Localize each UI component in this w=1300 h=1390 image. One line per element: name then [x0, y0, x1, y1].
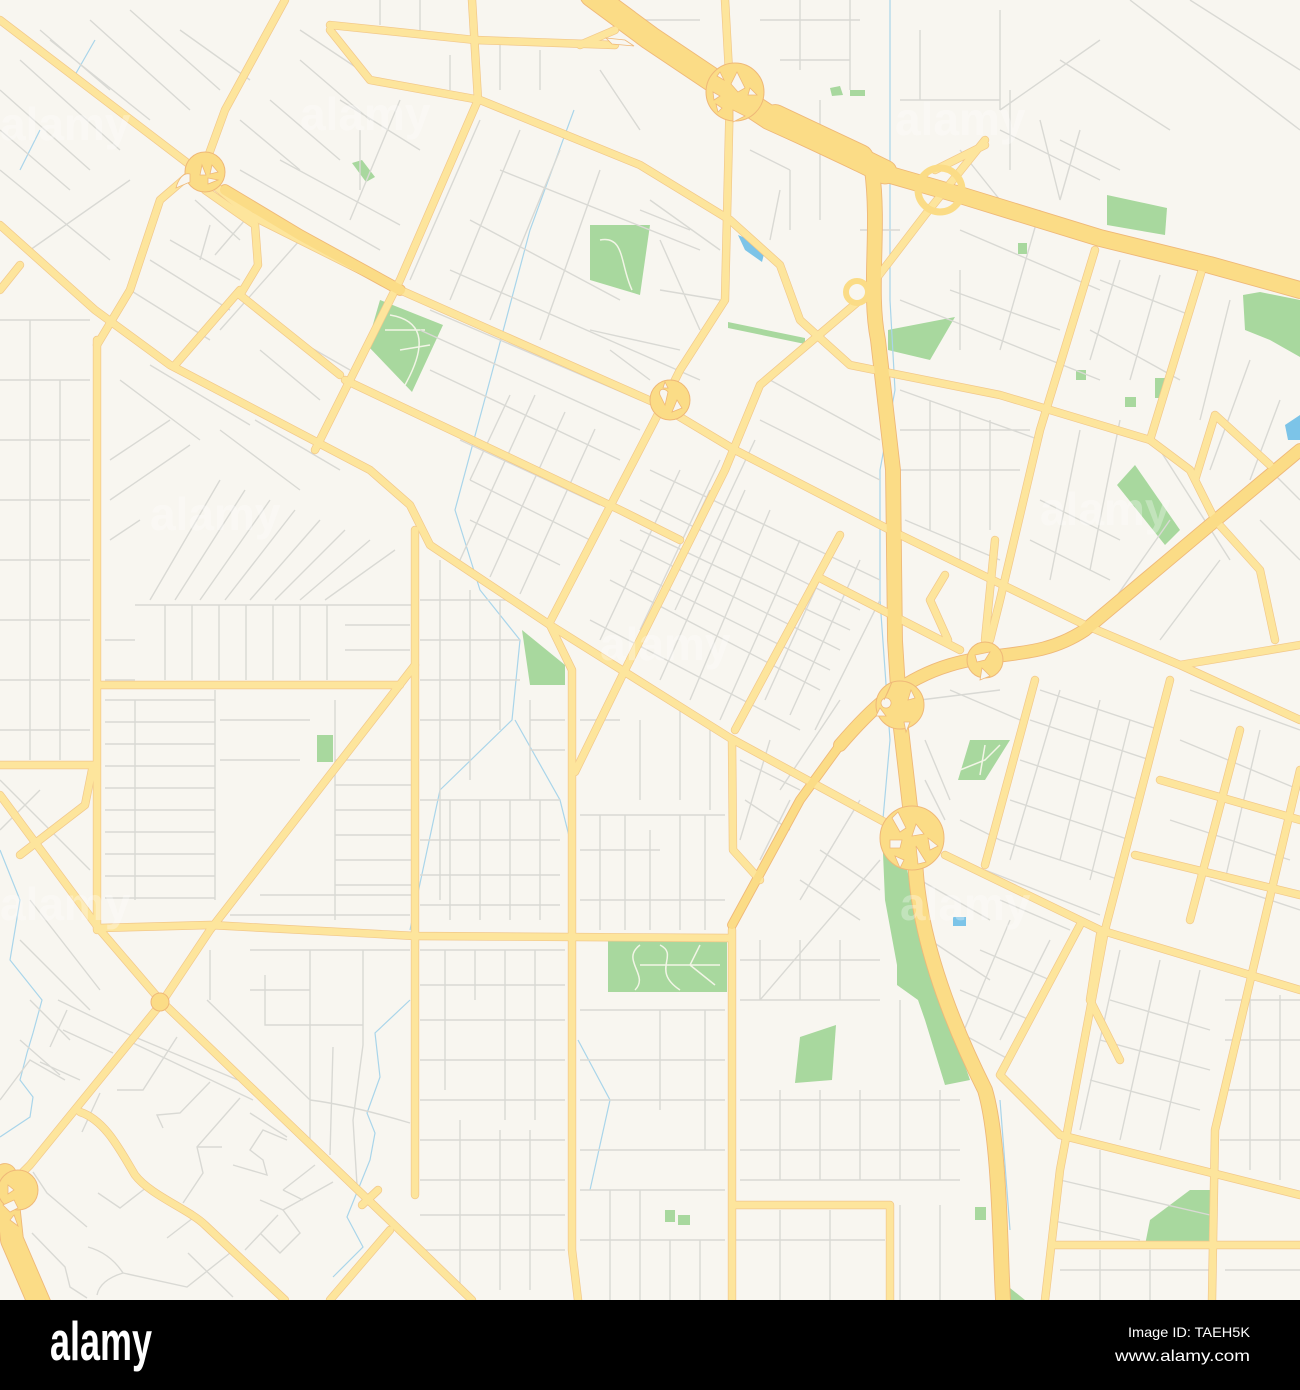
park footpaths — [385, 239, 1000, 990]
watermarks: alamy — [1040, 483, 1171, 535]
image id: Image ID: TAEH5K — [1128, 1324, 1251, 1340]
watermarks: alamy — [895, 93, 1026, 145]
watermarks: alamy — [300, 88, 431, 140]
watermarks: alamy — [150, 488, 281, 540]
website: www.alamy.com — [1114, 1348, 1250, 1365]
creeks — [0, 0, 1010, 1277]
footer bar — [0, 1300, 1300, 1390]
footer logo: alamy — [50, 1310, 152, 1372]
watermarks: alamy — [600, 618, 731, 670]
interchange islands — [3, 38, 990, 1226]
watermarks: alamy — [0, 98, 131, 150]
interchanges — [0, 63, 1003, 1210]
water bodies — [738, 235, 1300, 926]
watermarks — [0, 88, 1171, 930]
parks — [317, 86, 1300, 1300]
watermarks: alamy — [0, 878, 131, 930]
watermarks: alamy — [900, 878, 1031, 930]
